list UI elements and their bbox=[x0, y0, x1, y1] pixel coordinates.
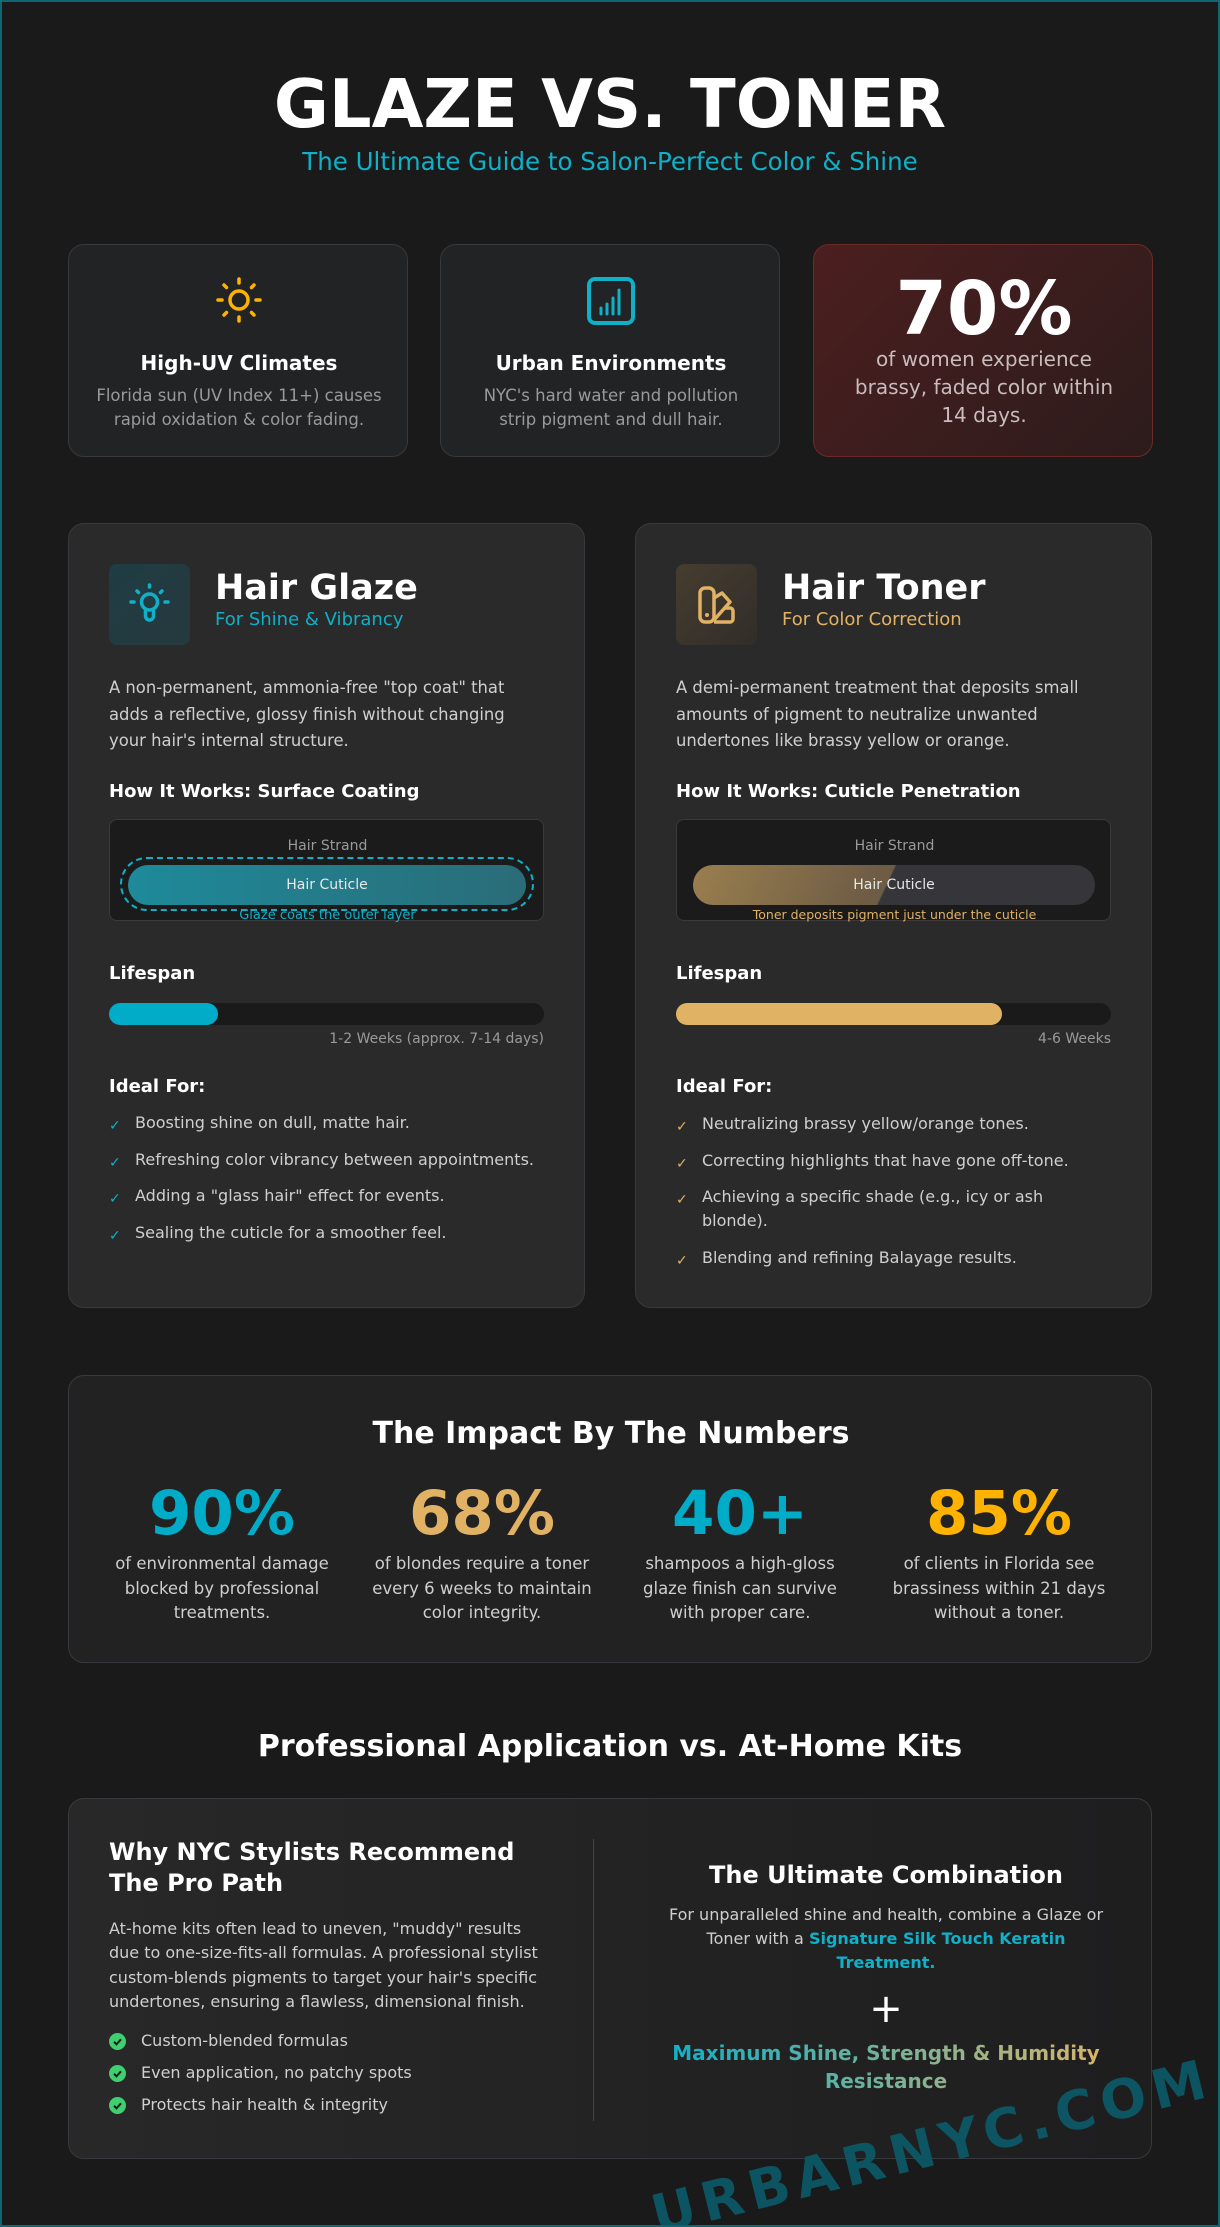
diagram: surface coating: Hair Cuticle bbox=[286, 877, 368, 893]
subheading: For Shine & Vibrancy bbox=[215, 609, 403, 630]
checklist bbox=[109, 2031, 412, 2114]
text: NYC's hard water and pollution strip pigment and dull hair. bbox=[484, 386, 738, 429]
icon: swatch bbox=[676, 564, 757, 645]
diagram: surface coating: Hair Strand bbox=[288, 838, 367, 854]
stat number: 70% bbox=[895, 266, 1073, 352]
list: toner uses bbox=[676, 1114, 1069, 1268]
heading: ideal for: Ideal For: bbox=[676, 1076, 772, 1097]
panel: hair glaze bbox=[68, 523, 585, 1308]
icon: sun bbox=[216, 277, 262, 323]
panel: 70% stat bbox=[813, 244, 1153, 457]
stat: 40+: shampoos a high-gloss glaze finish can survive with proper care. bbox=[643, 1554, 837, 1622]
stat: 90%: 90% bbox=[149, 1478, 295, 1549]
diagram: cuticle penetration: Hair Cuticle bbox=[853, 877, 935, 893]
list: glaze uses: Adding a "glass hair" effect for events. bbox=[135, 1186, 445, 1205]
subtitle: The Ultimate Guide to Salon-Perfect Color & Shine bbox=[302, 147, 918, 176]
description: A demi-permanent treatment that deposits small amounts of pigment to neutralize unwanted undertones like brassy yellow or orange. bbox=[676, 678, 1079, 750]
stat text: of women experience brassy, faded color within 14 days. bbox=[855, 347, 1113, 427]
checklist: Even application, no patchy spots bbox=[141, 2063, 412, 2082]
list: glaze uses: ✓ bbox=[109, 1191, 121, 1207]
stat: 85% bbox=[893, 1478, 1105, 1622]
checklist: Protects hair health & integrity bbox=[141, 2095, 388, 2114]
lifespan label: 4-6 Weeks bbox=[1038, 1031, 1111, 1047]
list: glaze uses: ✓ bbox=[109, 1154, 121, 1170]
icon: lightbulb bbox=[109, 564, 190, 645]
stat: 68%: of blondes require a toner every 6 weeks to maintain color integrity. bbox=[372, 1554, 592, 1622]
heading: Hair Toner bbox=[782, 568, 986, 608]
heading: lifespan: Lifespan bbox=[109, 963, 195, 984]
heading: how it works: How It Works: Cuticle Penetration bbox=[676, 781, 1021, 802]
list: glaze uses bbox=[109, 1113, 534, 1244]
stat: 85%: of clients in Florida see brassiness within 21 days without a toner. bbox=[893, 1554, 1105, 1622]
description: A non-permanent, ammonia-free "top coat" that adds a reflective, glossy finish without changing your hair's internal structure. bbox=[109, 678, 505, 750]
stat: 68% bbox=[372, 1478, 592, 1622]
block: ultimate combination bbox=[669, 1861, 1104, 2093]
bar: lifespan bbox=[109, 1003, 544, 1025]
block: ultimate combination: + bbox=[869, 1986, 903, 2032]
heading: Urban Environments bbox=[496, 351, 726, 375]
list: toner uses: Blending and refining Balayage results. bbox=[702, 1248, 1017, 1266]
panel: impact by the numbers bbox=[68, 1375, 1152, 1663]
section heading: professional vs at-home: Professional Application vs. At-Home Kits bbox=[258, 1729, 962, 1764]
heading: Hair Glaze bbox=[215, 568, 418, 608]
list: toner uses: ✓ bbox=[676, 1192, 688, 1208]
panel: urban environments bbox=[440, 244, 780, 457]
heading: High-UV Climates bbox=[141, 351, 337, 375]
stat: 90% bbox=[115, 1478, 329, 1622]
list: toner uses: Neutralizing brassy yellow/orange tones. bbox=[702, 1114, 1029, 1133]
diagram: cuticle penetration: Toner deposits pigment just under the cuticle bbox=[753, 907, 1036, 922]
stat: 40+ bbox=[643, 1478, 837, 1622]
panel: pro path bbox=[68, 1798, 1152, 2159]
diagram: surface coating: Glaze coats the outer layer bbox=[239, 908, 416, 923]
paragraph: At-home kits often lead to uneven, "muddy" results due to one-size-fits-all formulas. A professional stylist custom-blends pigments to target your hair's specific undertones, ensuring a flawless, dimensional finish. bbox=[109, 1919, 538, 2011]
heading: ideal for: Ideal For: bbox=[109, 1076, 205, 1097]
stat: 85%: 85% bbox=[926, 1478, 1072, 1549]
subheading: For Color Correction bbox=[782, 609, 962, 630]
checklist: Custom-blended formulas bbox=[141, 2031, 348, 2050]
list: glaze uses: Boosting shine on dull, matte hair. bbox=[135, 1113, 410, 1132]
stat: 68%: 68% bbox=[409, 1478, 555, 1549]
title: GLAZE VS. TONER bbox=[274, 65, 946, 143]
bar: lifespan bbox=[676, 1003, 1111, 1025]
list: glaze uses: ✓ bbox=[109, 1228, 121, 1244]
list: toner uses: ✓ bbox=[676, 1156, 688, 1172]
panel: high-UV climates bbox=[68, 244, 408, 457]
block: ultimate combination: Maximum Shine, Strength & Humidity Resistance bbox=[672, 2041, 1100, 2093]
diagram: cuticle penetration: Hair Strand bbox=[855, 838, 934, 854]
text: Florida sun (UV Index 11+) causes rapid oxidation & color fading. bbox=[96, 386, 382, 429]
block: ultimate combination: The Ultimate Combination bbox=[709, 1861, 1063, 1889]
heading: The Impact By The Numbers bbox=[372, 1416, 850, 1451]
heading: Why NYC Stylists Recommend The Pro Path bbox=[109, 1838, 514, 1897]
list: glaze uses: ✓ bbox=[109, 1118, 121, 1134]
list: toner uses: ✓ bbox=[676, 1119, 688, 1135]
diagram: surface coating bbox=[109, 819, 544, 921]
list: glaze uses: Sealing the cuticle for a smoother feel. bbox=[135, 1222, 446, 1242]
lifespan label: 1-2 Weeks (approx. 7-14 days) bbox=[329, 1031, 544, 1047]
stat: 90%: of environmental damage blocked by professional treatments. bbox=[115, 1554, 329, 1622]
list: toner uses: Correcting highlights that have gone off-tone. bbox=[702, 1150, 1069, 1170]
list: glaze uses: Refreshing color vibrancy between appointments. bbox=[135, 1150, 534, 1168]
diagram: cuticle penetration bbox=[676, 819, 1111, 921]
list: toner uses: ✓ bbox=[676, 1252, 688, 1268]
icon: chart bbox=[587, 277, 635, 325]
heading: how it works: How It Works: Surface Coating bbox=[109, 781, 419, 802]
panel: hair toner bbox=[635, 523, 1152, 1308]
stat: 40+: 40+ bbox=[672, 1478, 808, 1549]
list: toner uses: Achieving a specific shade (e.g., icy or ash blonde). bbox=[702, 1187, 1043, 1230]
block: ultimate combination: For unparalleled shine and health, combine a Glaze or Toner with a Signature Silk Touch Keratin Treatment. bbox=[669, 1905, 1103, 1972]
heading: lifespan: Lifespan bbox=[676, 963, 762, 984]
